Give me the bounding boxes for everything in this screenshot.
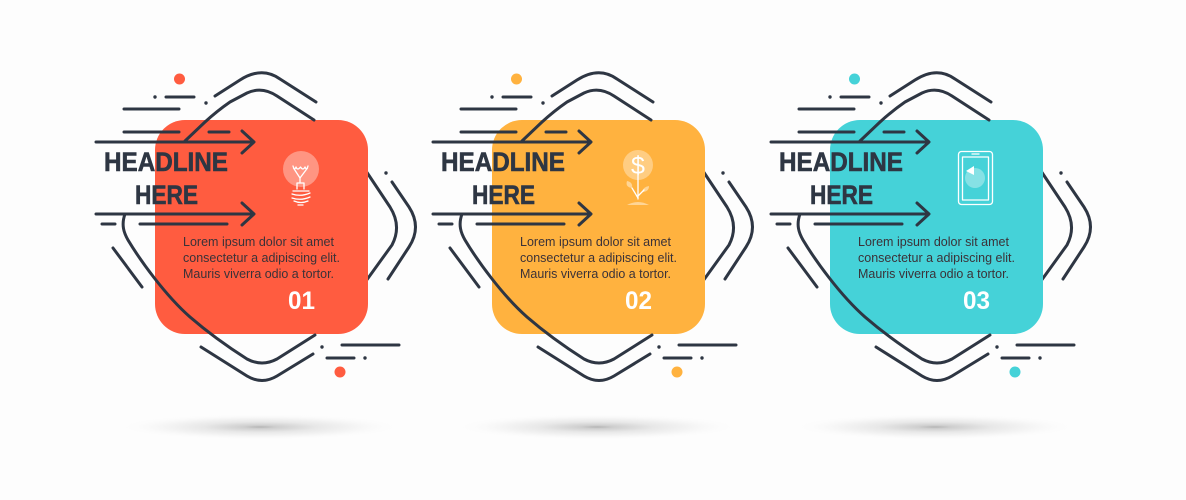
lines behind the card	[450, 73, 752, 381]
card	[155, 120, 368, 334]
panel: step 03	[771, 73, 1090, 440]
body text: Mauris viverra odio a tortor.	[183, 267, 334, 281]
headline: HERE	[810, 180, 873, 210]
headline: HERE	[472, 180, 535, 210]
accent dot top	[174, 74, 185, 84]
body text: Lorem ipsum dolor sit amet	[183, 235, 335, 249]
headline	[441, 147, 565, 210]
icon: money plant	[623, 150, 653, 205]
floor shadow	[793, 414, 1077, 440]
body text: consectetur a adipiscing elit.	[858, 251, 1015, 265]
accent dot bottom	[672, 366, 682, 378]
lines over the card	[433, 90, 736, 363]
headline	[779, 147, 903, 210]
small dots	[490, 95, 725, 360]
accent dot bottom	[334, 366, 346, 378]
body text: Lorem ipsum dolor sit amet	[858, 235, 1010, 249]
icon: light bulb	[283, 151, 319, 205]
headline: HEADLINE	[104, 147, 228, 177]
body text: Mauris viverra odio a tortor.	[858, 267, 1009, 281]
small dots	[153, 95, 388, 360]
body text	[183, 235, 340, 281]
accent dot top	[849, 74, 860, 84]
number: 01	[288, 287, 315, 315]
icon: tablet with pie chart	[958, 152, 992, 204]
accent dot top	[511, 74, 522, 84]
body text: Lorem ipsum dolor sit amet	[520, 235, 672, 249]
body text: Mauris viverra odio a tortor.	[520, 267, 671, 281]
headline: HEADLINE	[779, 147, 903, 177]
floor shadow	[118, 414, 402, 440]
lines behind the card	[788, 73, 1090, 381]
headline: HERE	[135, 180, 198, 210]
body text: consectetur a adipiscing elit.	[183, 251, 340, 265]
floor shadow	[455, 414, 739, 440]
lines over the card	[96, 90, 399, 363]
number: 03	[963, 287, 990, 315]
body text: consectetur a adipiscing elit.	[520, 251, 677, 265]
lines behind the card	[113, 73, 416, 381]
panel: step 02	[433, 73, 752, 440]
body text	[520, 235, 677, 281]
card	[830, 120, 1043, 334]
card	[492, 120, 705, 334]
small dots	[828, 95, 1063, 360]
icon: money plant: $	[631, 152, 645, 180]
panel: step 01	[96, 73, 416, 440]
lines over the card	[771, 90, 1074, 363]
accent dot bottom	[1010, 366, 1020, 378]
body text	[858, 235, 1015, 281]
headline: HEADLINE	[441, 147, 565, 177]
headline	[104, 147, 228, 210]
number: 02	[625, 287, 652, 315]
